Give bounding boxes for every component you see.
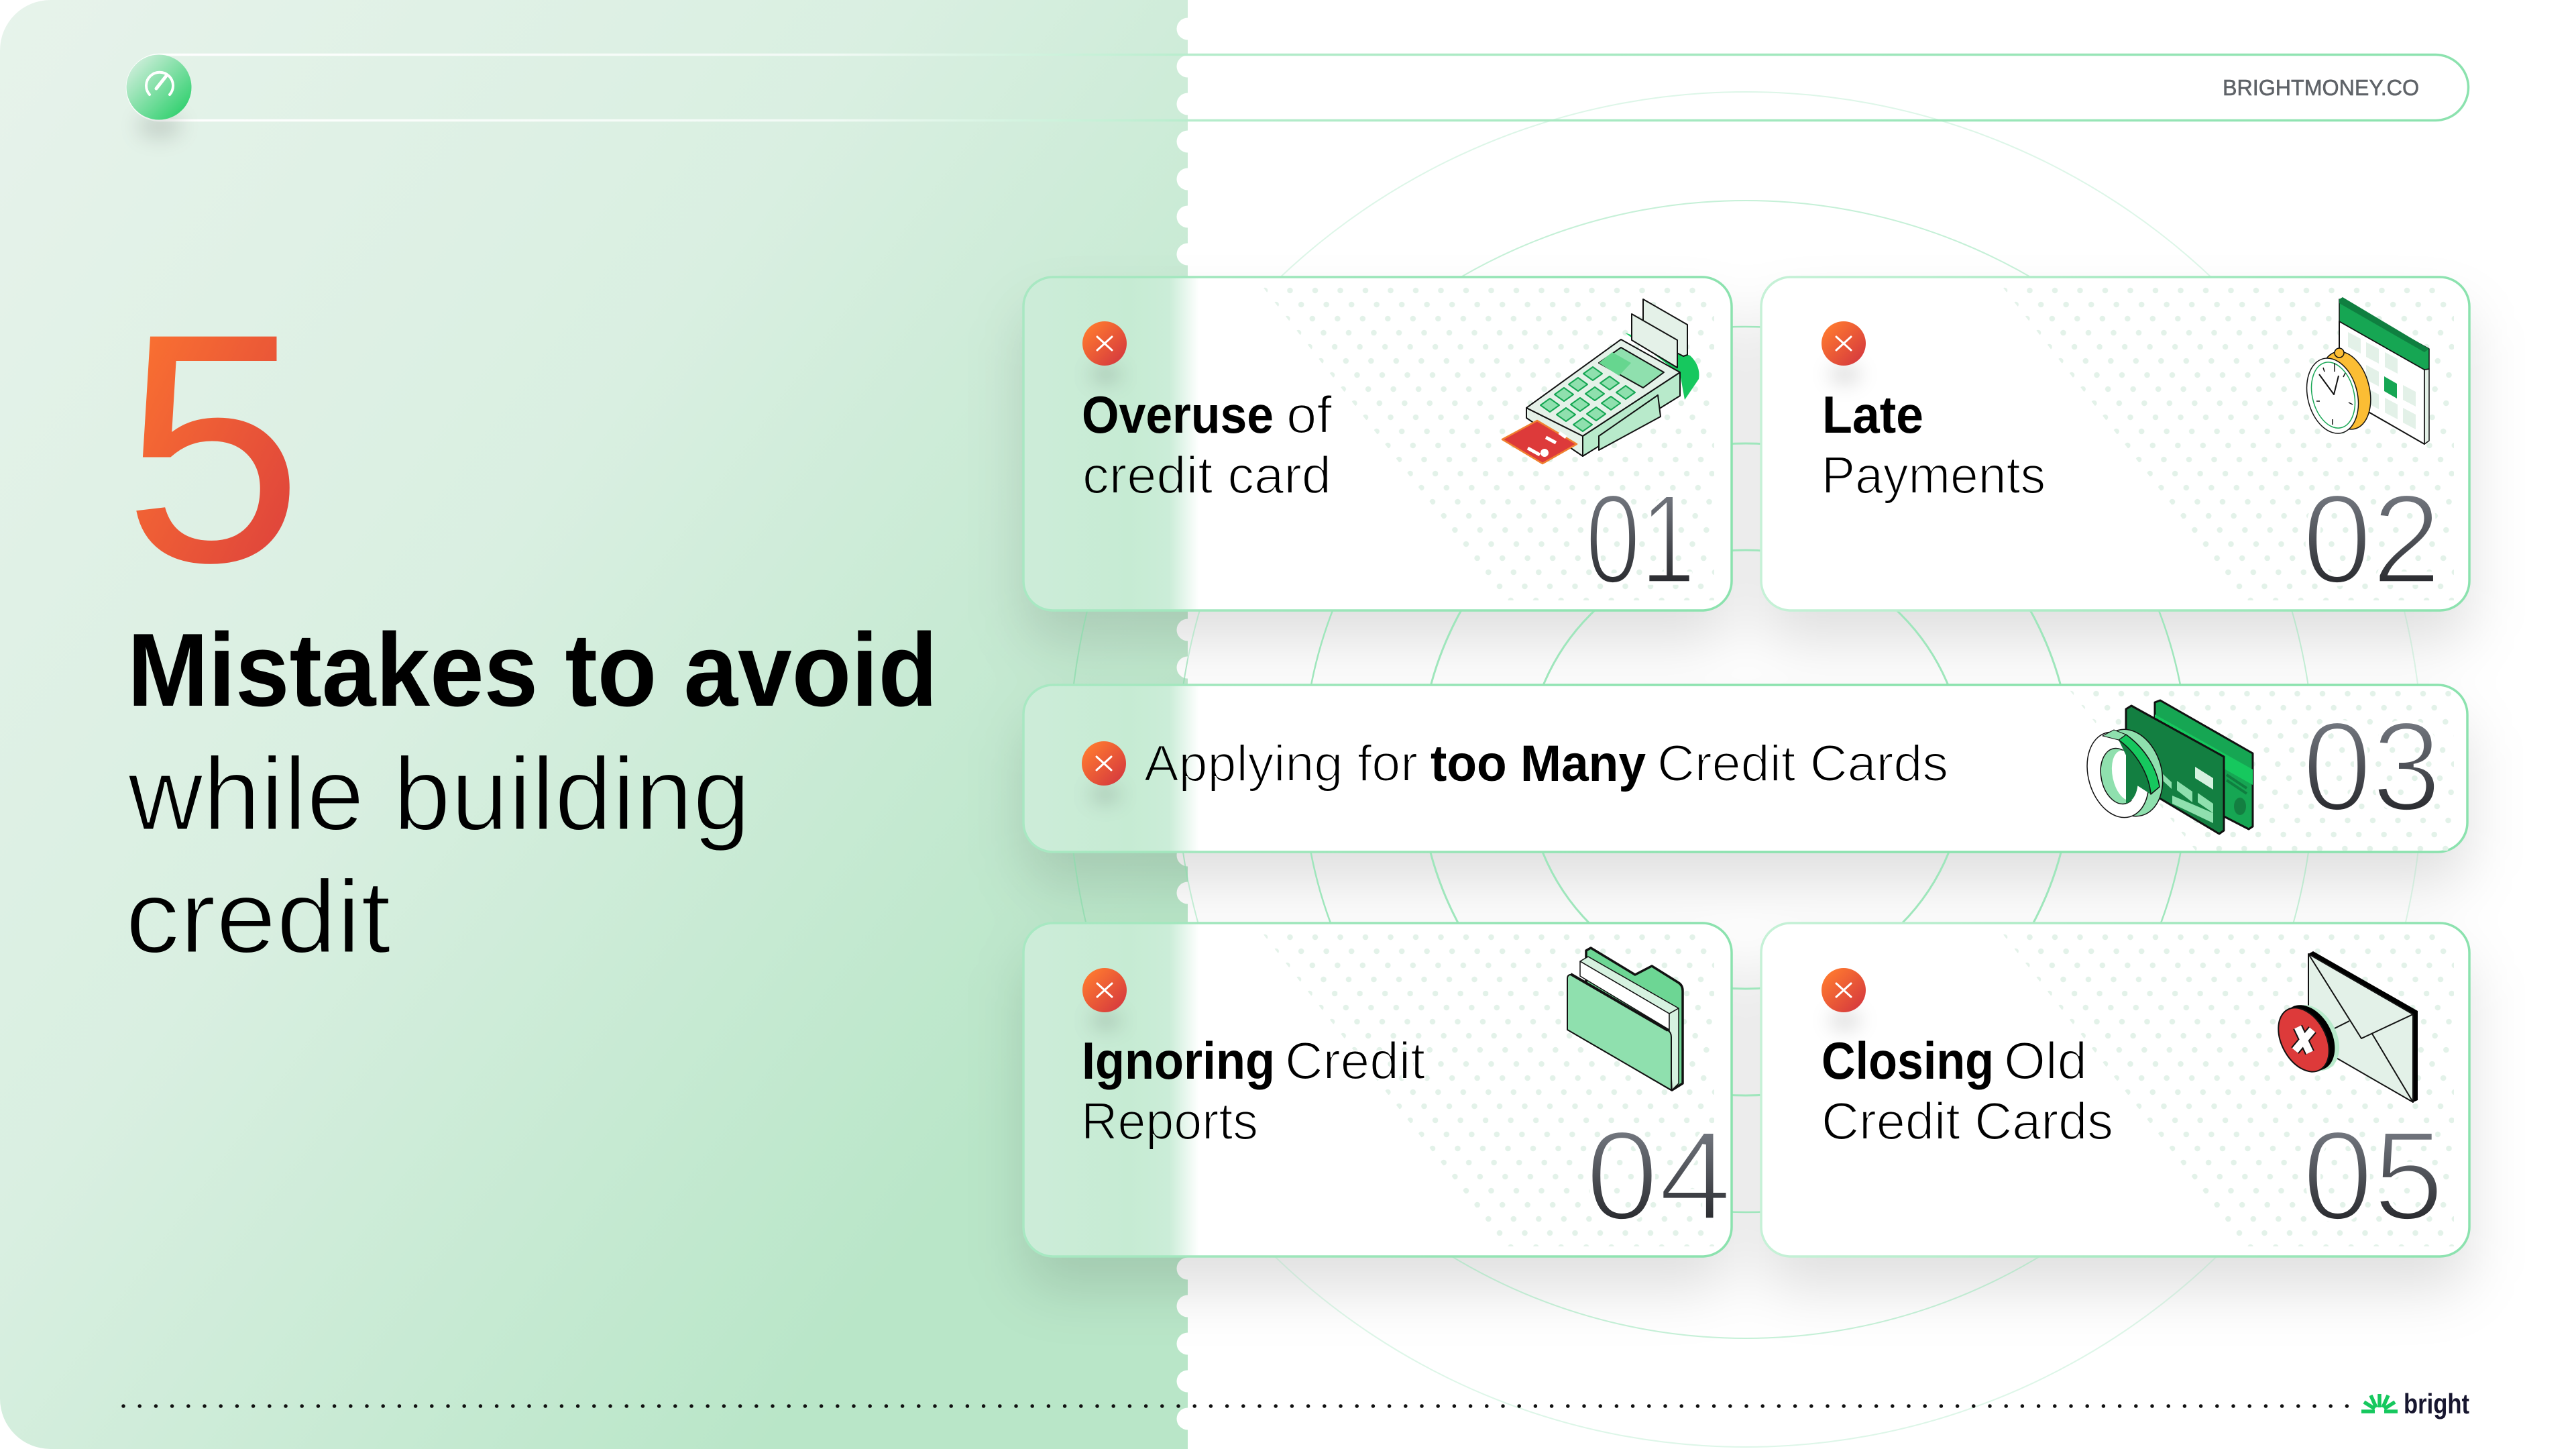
number 02: 02 [2302, 468, 2441, 610]
heading: credit: Credit [1285, 1031, 1425, 1090]
icon: calendar with clock [2299, 297, 2429, 444]
icon: speedometer badge [126, 55, 192, 140]
panel: card 03 applying for too many credit cards [1023, 685, 2467, 852]
panel: card 04 ignoring credit reports [1023, 923, 1732, 1256]
text: credit cards: Credit Cards [1657, 735, 1948, 792]
text: too many: too Many [1431, 735, 1646, 792]
number 01: 01 [1585, 468, 1695, 610]
heading: of: of [1286, 385, 1332, 444]
icon: envelope with red x [2268, 951, 2418, 1102]
title: credit: credit [125, 859, 391, 975]
panel: card 05 closing old credit cards [1761, 923, 2469, 1256]
number 05: 05 [2302, 1105, 2444, 1247]
footer dotted line [123, 1404, 2347, 1408]
heading: payments: Payments [1822, 445, 2046, 504]
icon: card payment terminal [1502, 299, 1699, 464]
text: applying for: Applying for [1144, 735, 1418, 792]
header bar [127, 55, 2468, 121]
heading: reports: Reports [1081, 1091, 1258, 1150]
panel: left green background with scalloped edge [0, 0, 1199, 1449]
icon: credit cards with ring [2078, 700, 2253, 834]
concentric background rings [1068, 92, 2423, 1447]
icon: red x badge [1822, 968, 1866, 1030]
heading: old: Old [2004, 1031, 2087, 1090]
icon: red x badge [1082, 321, 1127, 384]
number 03: 03 [2302, 696, 2441, 838]
icon: red x badge [1082, 741, 1126, 804]
heading: ignoring: Ignoring [1082, 1031, 1275, 1090]
logo wordmark: bright [2404, 1388, 2469, 1419]
icon: red x badge [1822, 321, 1866, 384]
bright logo [2361, 1388, 2469, 1419]
heading: credit card: credit card [1082, 445, 1331, 504]
heading: closing: Closing [1822, 1031, 1994, 1090]
icon: folder [1567, 948, 1683, 1090]
title: while building: while building [127, 736, 750, 852]
heading: late: Late [1822, 385, 1923, 444]
panel: card 01 overuse of credit card [1023, 277, 1732, 610]
card drop shadows [1023, 311, 2469, 1290]
website label: BRIGHTMONEY.CO [2223, 75, 2419, 100]
heading: credit cards: Credit Cards [1822, 1091, 2113, 1150]
heading: overuse: Overuse [1082, 385, 1274, 444]
title: Mistakes to avoid: Mistakes to avoid [127, 612, 938, 728]
number 04: 04 [1585, 1105, 1732, 1247]
icon: red x badge [1082, 968, 1127, 1030]
big number 5: 5 [123, 266, 303, 630]
icon: bright sun mark [2361, 1394, 2398, 1411]
panel: card 02 late payments [1761, 277, 2469, 610]
